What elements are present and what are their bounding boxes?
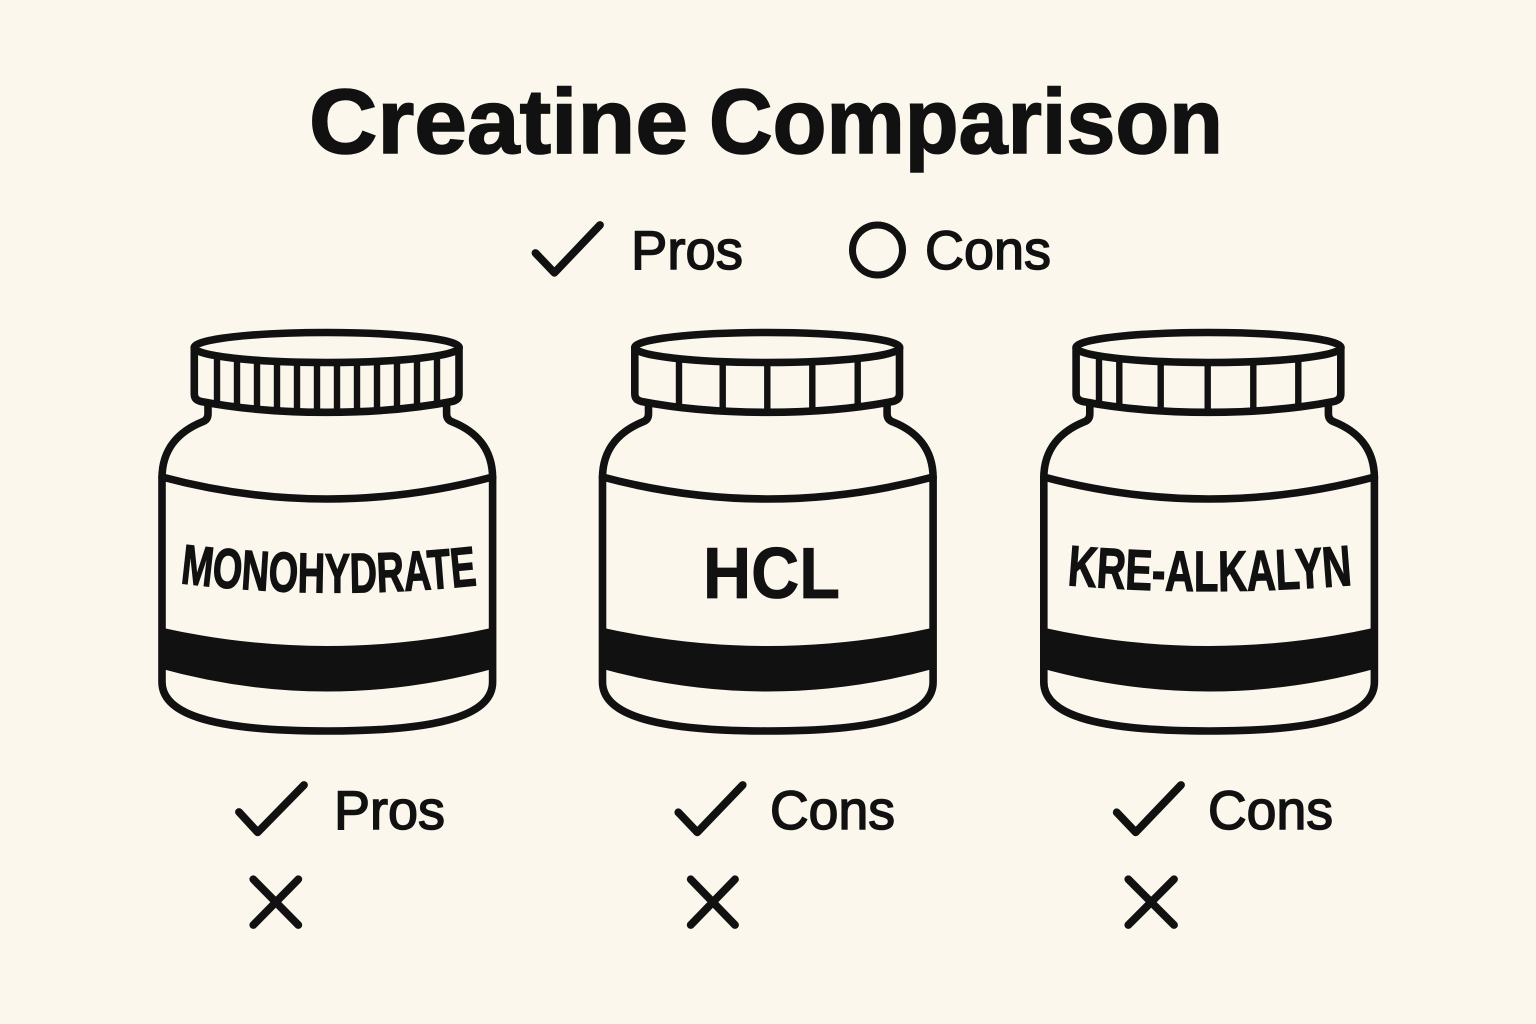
label: cons: Cons: [770, 779, 895, 841]
jar lid: [635, 332, 900, 412]
title: Creatine: [309, 71, 688, 173]
legend label: cons: Cons: [925, 219, 1051, 281]
panel: kre-alkalyn jar: [1040, 328, 1378, 735]
label: pros: Pros: [334, 779, 445, 841]
jar label: monohydrate: MONOHYDRATE: [182, 544, 476, 594]
jar body: [599, 405, 936, 731]
icon: cross: [691, 879, 735, 925]
column: hcl pros and cons: [678, 779, 895, 925]
icon: check: [1117, 785, 1181, 832]
label: cons: Cons: [1208, 779, 1333, 841]
icon: check: [678, 785, 743, 832]
jar body: [158, 405, 496, 731]
jar label: kre-alkalyn: KRE-ALKALYN: [1069, 545, 1350, 592]
legend label: pros: Pros: [631, 219, 743, 281]
column: monohydrate pros and cons: [239, 779, 445, 925]
panel: hcl jar: [599, 332, 936, 731]
icon: cross: [253, 879, 298, 925]
legend: [536, 219, 1051, 281]
icon: cross: [1128, 879, 1174, 925]
icon: check: [239, 785, 304, 832]
icon: legend check: [536, 225, 600, 273]
jar body: [1040, 405, 1378, 731]
column: kre-alkalyn pros and cons: [1117, 779, 1333, 925]
jar lid: [194, 332, 459, 412]
jar lid: [1076, 332, 1341, 412]
title: Comparison: [709, 71, 1223, 173]
jar label: hcl: HCL: [703, 534, 840, 614]
icon: legend circle: [852, 225, 902, 275]
panel: monohydrate jar: [158, 328, 496, 735]
